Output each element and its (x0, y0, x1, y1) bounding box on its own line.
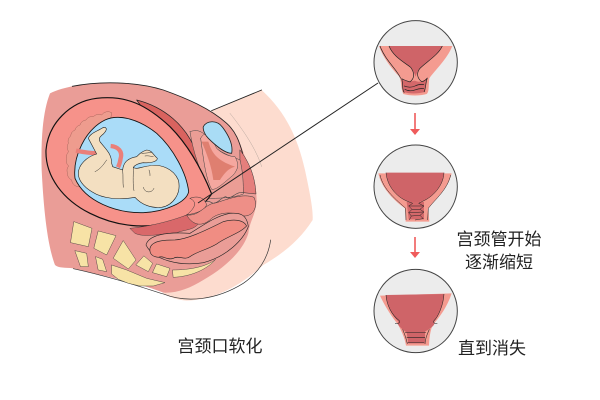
vaginal canal (187, 196, 256, 224)
fetus details (95, 152, 154, 192)
canal (402, 78, 427, 93)
bone 3 (113, 241, 136, 269)
cavity (386, 294, 444, 343)
caption: until gone: 直到消失 (458, 339, 526, 358)
vagina wall right (240, 150, 256, 194)
anatomy illustration (41, 83, 313, 301)
bone 1 (71, 222, 92, 247)
umbilical cord (76, 146, 121, 167)
circle 3: cervix effaced (374, 269, 457, 353)
caption: canal shortening (456, 230, 542, 272)
back outline (212, 90, 262, 111)
leader line (198, 83, 378, 203)
cervix canal (202, 142, 235, 180)
pelvis bottom outline (73, 240, 271, 299)
arrow 1 (410, 113, 420, 135)
bone 2 (94, 231, 116, 255)
wall (379, 46, 452, 95)
outlines (380, 173, 451, 220)
uterus lower block (190, 131, 243, 198)
circle 2: canal shortening (374, 145, 457, 228)
cervix wavy line (205, 192, 243, 203)
cervix rim (201, 134, 238, 189)
bone 5 (153, 264, 170, 277)
pelvis top outline (72, 83, 243, 153)
caption: cervix softening: 宫颈口软化 (178, 337, 262, 356)
circle 1: cervix closed (374, 21, 457, 104)
wall (378, 173, 452, 222)
fetus group (76, 127, 179, 207)
bone 6 curved (173, 259, 216, 277)
uterus (46, 98, 212, 226)
outlines (380, 46, 442, 93)
fetus body and head (78, 127, 179, 207)
bone 9 long (112, 265, 165, 286)
body skin (163, 90, 313, 301)
cavity (386, 173, 444, 202)
rectum inner (150, 220, 247, 259)
placenta (66, 112, 112, 187)
bladder (203, 122, 232, 153)
amniotic sac (75, 117, 189, 213)
caption: canal shortening: 宫颈管开始 (456, 230, 542, 249)
bone 8 (96, 257, 107, 272)
cavity (389, 46, 442, 77)
pelvis section (41, 83, 257, 293)
wall (380, 293, 452, 346)
muscle wall dark (137, 100, 213, 195)
lower uterine fold (187, 197, 207, 215)
arrow 2 (410, 237, 420, 258)
bone 4 (136, 256, 153, 272)
canal (407, 202, 424, 219)
sacrum bones (71, 222, 216, 286)
thigh crease (230, 113, 262, 167)
dark wall under uterus (130, 215, 199, 236)
caption: canal shortening: 逐渐缩短 (465, 253, 533, 272)
outlines (386, 294, 444, 344)
rectum outer (146, 213, 248, 264)
bone 7 (75, 251, 88, 267)
